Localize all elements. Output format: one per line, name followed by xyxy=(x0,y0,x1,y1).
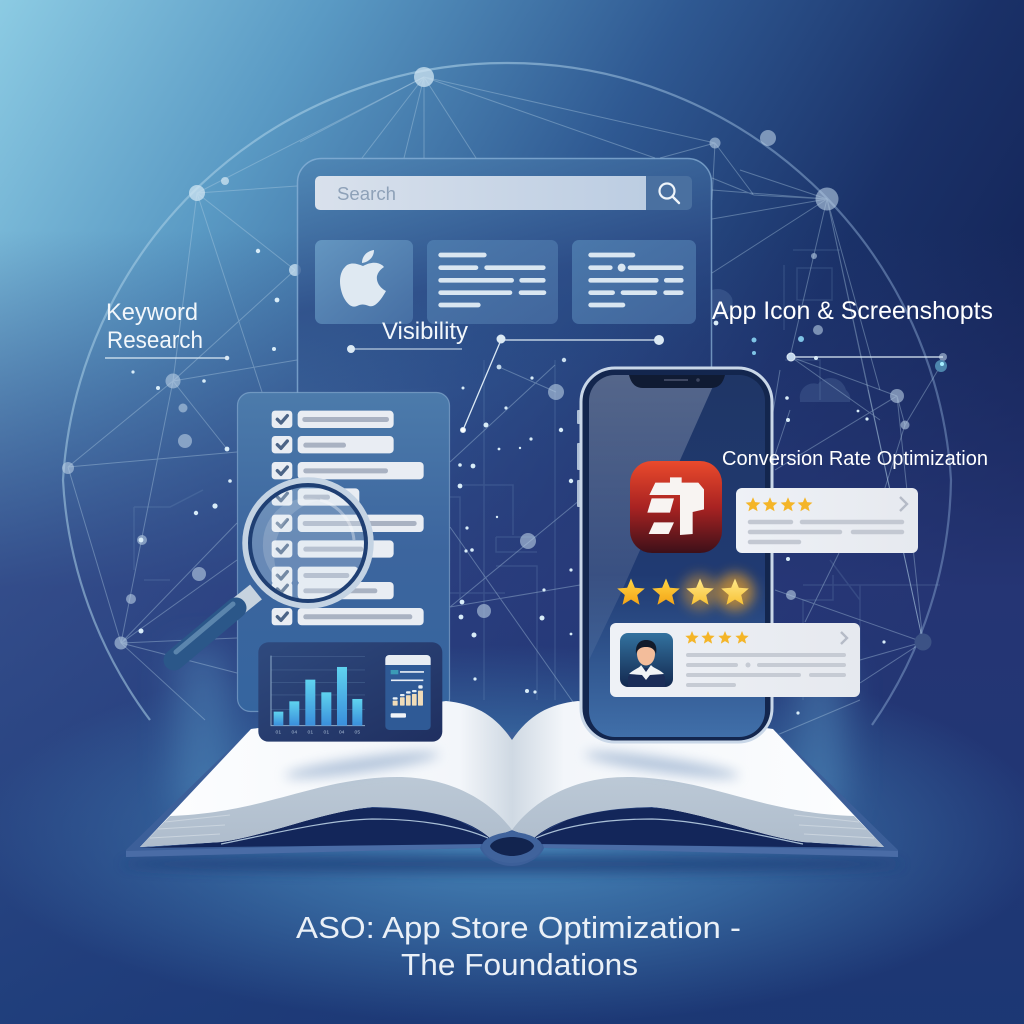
phone screen xyxy=(589,375,765,737)
axis labels xyxy=(276,730,360,736)
avatar icon xyxy=(620,633,673,687)
tile: listing details xyxy=(572,240,696,324)
label: conversion rate optimization: Conversion Rate Optimization xyxy=(722,448,988,470)
title xyxy=(296,910,741,982)
axis labels: 04 xyxy=(339,730,345,736)
title: The Foundations xyxy=(401,947,638,982)
mini dashboard xyxy=(385,655,431,730)
book cover xyxy=(122,732,902,873)
label: visibility: Visibility xyxy=(382,318,468,345)
panel: keyword checklist xyxy=(238,392,450,712)
review card: top xyxy=(736,488,918,553)
tile: listing text xyxy=(427,240,558,324)
axis labels: 01 xyxy=(324,730,329,736)
illustration: open book xyxy=(122,701,902,873)
review card: bottom with avatar xyxy=(610,623,860,697)
label: app icon and screenshots: App Icon & Screenshopts xyxy=(712,297,993,325)
connector lines xyxy=(105,335,943,432)
axis labels: 05 xyxy=(355,730,360,736)
icon: magnifying glass xyxy=(174,481,370,660)
rating stars xyxy=(617,573,754,611)
phone mockup xyxy=(577,368,772,742)
tile: apple logo xyxy=(315,240,413,324)
right pages xyxy=(512,701,884,848)
label: keyword research xyxy=(106,299,203,354)
side buttons xyxy=(577,410,581,507)
panel: app store search window xyxy=(298,158,712,395)
search bar: Search xyxy=(337,184,396,204)
search bar xyxy=(315,176,692,210)
left pages xyxy=(140,701,512,848)
book spine xyxy=(482,832,542,863)
notch xyxy=(629,375,725,388)
label: keyword research: Keyword xyxy=(106,299,198,326)
axis labels: 01 xyxy=(308,730,313,736)
app icon xyxy=(630,461,722,553)
title: ASO: App Store Optimization - xyxy=(296,910,741,945)
panel: analytics bar chart xyxy=(258,642,442,742)
label: keyword research: Research xyxy=(107,327,203,354)
network globe: arc, lines and nodes xyxy=(62,63,951,738)
bars xyxy=(274,667,362,726)
axis labels: 01 xyxy=(276,730,281,736)
axis labels: 04 xyxy=(292,730,297,736)
